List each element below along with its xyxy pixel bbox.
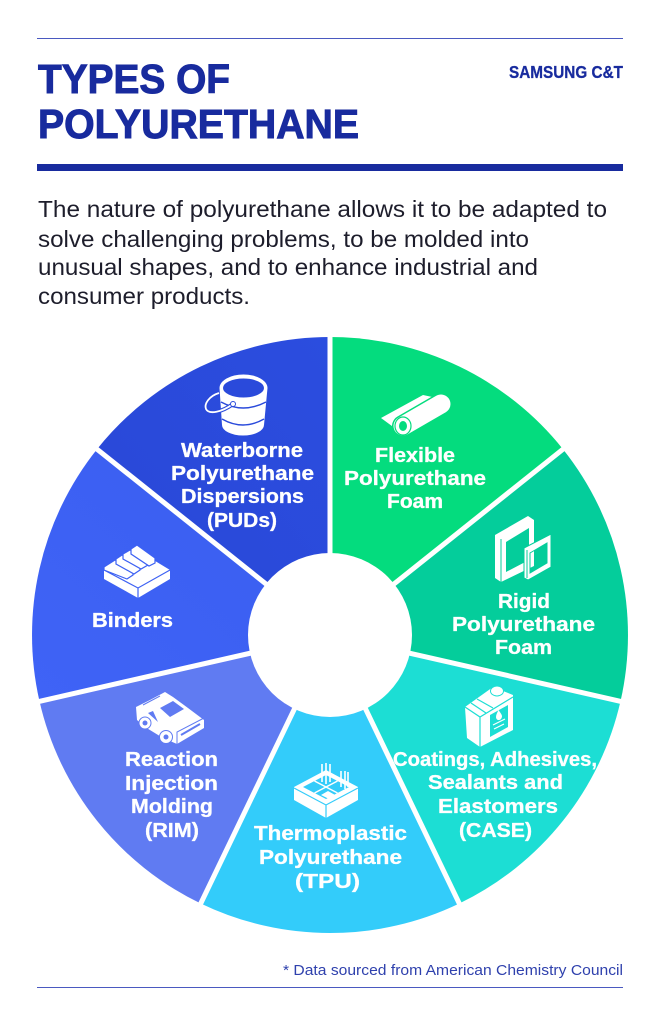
icon: foam frames (495, 516, 551, 582)
slice: RIM (40, 635, 330, 904)
icon: bucket (206, 374, 268, 436)
slice: rigid foam (330, 449, 628, 701)
icon: car (136, 692, 204, 744)
label: CASE: (CASE) (459, 820, 532, 842)
label: flexible foam: Polyurethane (344, 468, 486, 490)
label: TPU: Thermoplastic (254, 823, 407, 845)
label: RIM: Reaction (125, 749, 218, 771)
title: POLYURETHANE (38, 101, 359, 147)
label: waterborne: Polyurethane (171, 463, 314, 485)
label: flexible foam: Flexible (375, 445, 455, 467)
icon: foam roll (381, 395, 441, 435)
label: RIM: (RIM) (145, 820, 199, 842)
intro text: unusual shapes, and to enhance industrial and (38, 254, 538, 280)
label: TPU: (TPU) (295, 871, 360, 893)
label: CASE (393, 749, 597, 842)
label: RIM (125, 749, 218, 842)
label: TPU (254, 823, 407, 893)
pie chart (32, 330, 628, 933)
intro text: consumer products. (38, 283, 250, 309)
icon: canister (465, 686, 513, 747)
label: RIM: Molding (131, 796, 213, 818)
slice: flexible foam (330, 337, 563, 635)
source note: * Data sourced from American Chemistry Council (283, 962, 623, 979)
label: rigid foam (452, 591, 595, 659)
slice: TPU (201, 635, 459, 933)
intro text (38, 196, 607, 309)
label: CASE: Elastomers (438, 796, 558, 818)
label: flexible foam: Foam (387, 491, 443, 513)
label: waterborne: Dispersions (181, 486, 304, 508)
label: TPU: Polyurethane (259, 847, 402, 869)
label: waterborne: (PUDs) (207, 510, 277, 532)
label: flexible foam (344, 445, 486, 513)
slice: CASE (330, 635, 620, 904)
icon: mold block (294, 763, 358, 818)
label: RIM: Injection (125, 773, 218, 795)
label: waterborne: Waterborne (181, 440, 303, 462)
slice: waterborne (97, 337, 330, 635)
intro text: solve challenging problems, to be molded into (38, 226, 529, 252)
label: waterborne (171, 440, 314, 532)
label: rigid foam: Rigid (498, 591, 550, 613)
label: binders: Binders (92, 610, 173, 632)
label: CASE: Sealants and (428, 772, 563, 794)
label: rigid foam: Foam (495, 637, 552, 659)
title (38, 56, 359, 147)
icon: binders block (104, 545, 170, 598)
slice: binders (32, 449, 330, 701)
label: CASE: Coatings, Adhesives, (393, 749, 597, 771)
brand name: SAMSUNG C&T (509, 62, 623, 82)
intro text: The nature of polyurethane allows it to be adapted to (38, 196, 607, 222)
label: rigid foam: Polyurethane (452, 614, 595, 636)
title: TYPES OF (38, 56, 230, 102)
